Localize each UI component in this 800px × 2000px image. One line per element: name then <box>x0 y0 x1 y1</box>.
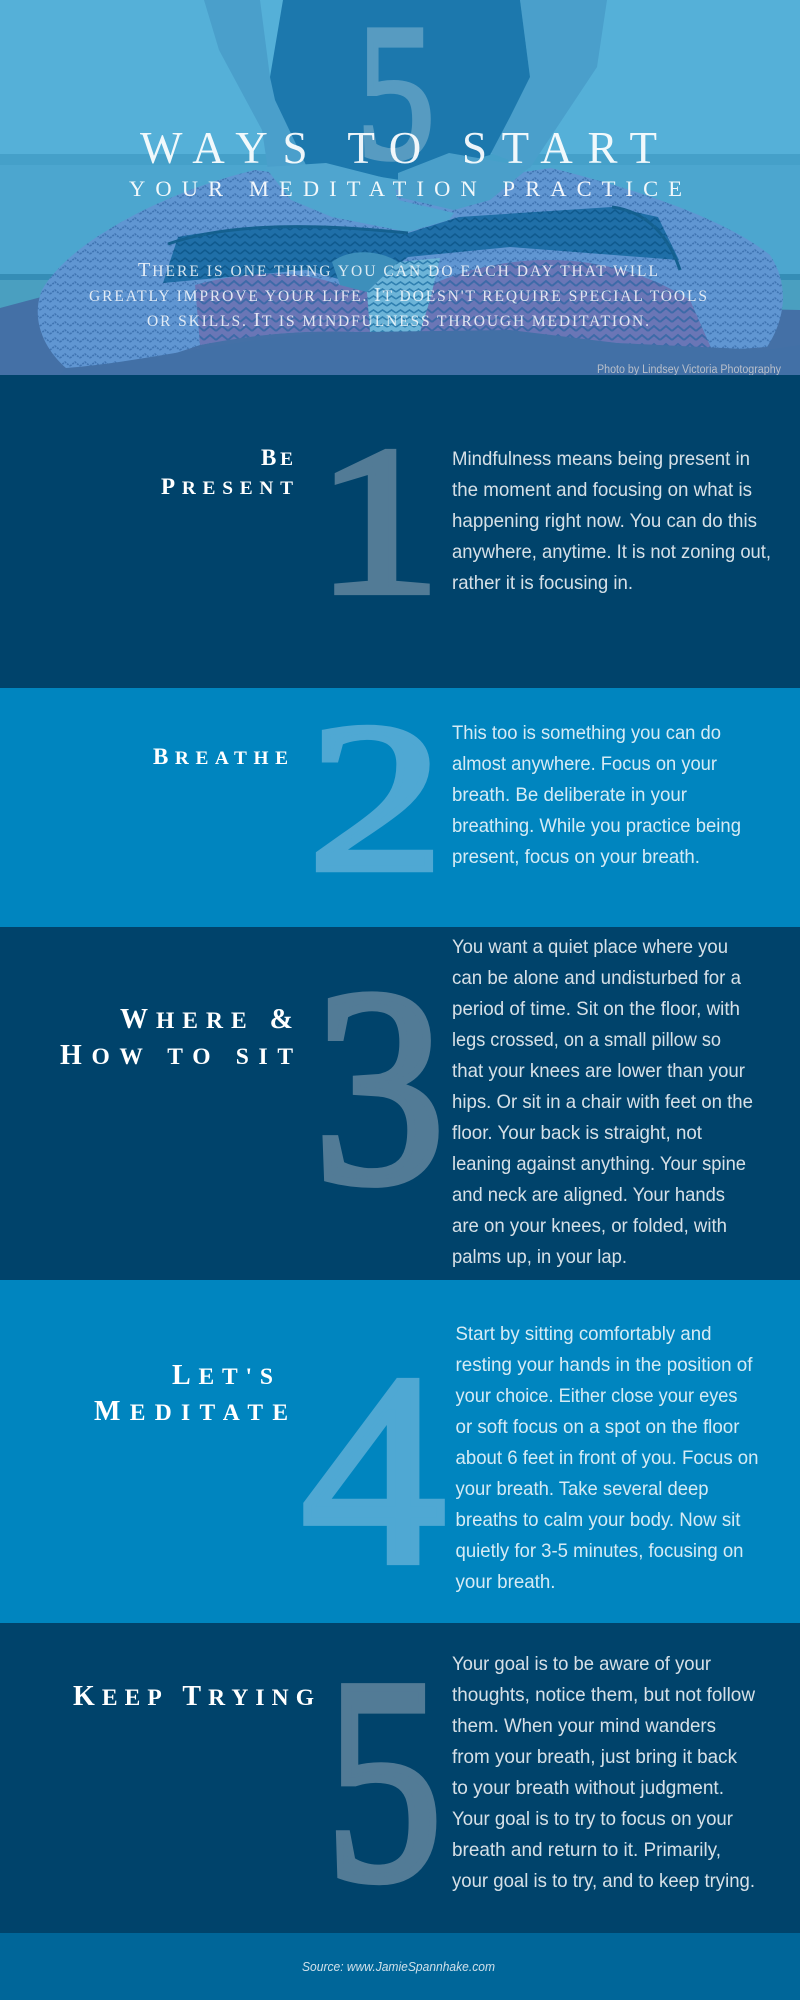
source credit: Source: www.JamieSpannhake.com <box>302 1959 495 1974</box>
body text: Mindfulness means being present in <box>452 448 750 470</box>
body text <box>456 1323 758 1593</box>
body text: rather it is focusing in. <box>452 572 633 594</box>
body text: the moment and focusing on what is <box>452 479 752 501</box>
intro paragraph: GREATLY IMPROVE YOUR LIFE. IT DOESN'T REQUIRE SPECIAL TOOLS <box>89 284 707 306</box>
body text <box>452 1653 756 1892</box>
heading: lets meditate: L ET'S <box>172 1360 273 1391</box>
body text: breath. Be deliberate in your <box>452 784 687 806</box>
title: WAYS TO START <box>140 123 657 173</box>
body text: You want a quiet place where you <box>452 936 728 958</box>
body text <box>452 722 741 868</box>
body text: present, focus on your breath. <box>452 846 700 868</box>
photo credit: Photo by Lindsey Victoria Photography <box>597 364 781 376</box>
numeral 5: 5 <box>326 1619 442 1941</box>
body text: that your knees are lower than your <box>452 1060 745 1082</box>
body text: your breath. Take several deep <box>456 1478 709 1500</box>
body text: them. When your mind wanders <box>452 1715 716 1737</box>
numeral 2: 2 <box>308 679 444 915</box>
body text: quietly for 3-5 minutes, focusing on <box>456 1540 744 1562</box>
body text: period of time. Sit on the floor, with <box>452 998 740 1020</box>
body text: Your goal is to be aware of your <box>452 1653 711 1675</box>
panel: step 4 lets meditate <box>0 1280 800 1623</box>
body text: palms up, in your lap. <box>452 1246 627 1268</box>
panel: footer source <box>0 1933 800 2000</box>
body text: are on your knees, or folded, with <box>452 1215 727 1237</box>
body text: floor. Your back is straight, not <box>452 1122 703 1144</box>
body text: This too is something you can do <box>452 722 721 744</box>
numeral 4: 4 <box>302 1319 445 1620</box>
body text: and neck are aligned. Your hands <box>452 1184 725 1206</box>
heading: keep trying: K EEP T RYING <box>73 1681 314 1712</box>
body text: leaning against anything. Your spine <box>452 1153 746 1175</box>
body text: anywhere, anytime. It is not zoning out, <box>452 541 771 563</box>
body text: almost anywhere. Focus on your <box>452 753 717 775</box>
body text: happening right now. You can do this <box>452 510 757 532</box>
panel: step 1 be present <box>0 375 800 688</box>
photo: blue-tinted seated meditator <box>0 0 800 375</box>
heading: lets meditate <box>94 1360 288 1427</box>
body text: from your breath, just bring it back <box>452 1746 737 1768</box>
body text: thoughts, notice them, but not follow <box>452 1684 756 1706</box>
heading: be present: P RESENT <box>161 474 293 499</box>
heading: where and how to sit: H OW TO SIT <box>60 1040 293 1071</box>
panel: step 3 where and how to sit <box>0 927 800 1280</box>
heading: where and how to sit: W HERE & <box>120 1004 293 1035</box>
heading: be present: BE <box>261 445 293 470</box>
body text: breath and return to it. Primarily, <box>452 1839 721 1861</box>
numeral 1: 1 <box>316 404 441 639</box>
body text: breaths to calm your body. Now sit <box>456 1509 741 1531</box>
heading: lets meditate: M EDITATE <box>94 1396 288 1427</box>
numeral 3: 3 <box>314 931 445 1242</box>
heading: be present <box>161 445 293 499</box>
body text: can be alone and undisturbed for a <box>452 967 741 989</box>
heading: breathe: B REATHE <box>153 744 288 769</box>
panel: step 2 breathe <box>0 679 800 927</box>
body text: your breath. <box>456 1571 556 1593</box>
body text: resting your hands in the position of <box>456 1354 753 1376</box>
panel: hero photo header <box>0 0 800 376</box>
body text: breathing. While you practice being <box>452 815 741 837</box>
panel: step 5 keep trying <box>0 1619 800 1941</box>
intro paragraph: THERE IS ONE THING YOU CAN DO EACH DAY THAT WILL <box>138 259 658 281</box>
body text: Start by sitting comfortably and <box>456 1323 712 1345</box>
body text <box>452 936 753 1268</box>
body text: legs crossed, on a small pillow so <box>452 1029 721 1051</box>
body text: about 6 feet in front of you. Focus on <box>456 1447 758 1469</box>
heading: where and how to sit <box>60 1004 293 1071</box>
body text: or soft focus on a spot on the floor <box>456 1416 740 1438</box>
body text <box>452 448 771 594</box>
subtitle: YOUR MEDITATION PRACTICE <box>129 176 682 201</box>
body text: your goal is to try, and to keep trying. <box>452 1870 755 1892</box>
body text: to your breath without judgment. <box>452 1777 724 1799</box>
body text: Your goal is to try to focus on your <box>452 1808 733 1830</box>
intro paragraph: OR SKILLS. IT IS MINDFULNESS THROUGH MEDITATION. <box>147 309 649 331</box>
body text: hips. Or sit in a chair with feet on the <box>452 1091 753 1113</box>
body text: your choice. Either close your eyes <box>456 1385 738 1407</box>
intro paragraph <box>89 259 707 331</box>
